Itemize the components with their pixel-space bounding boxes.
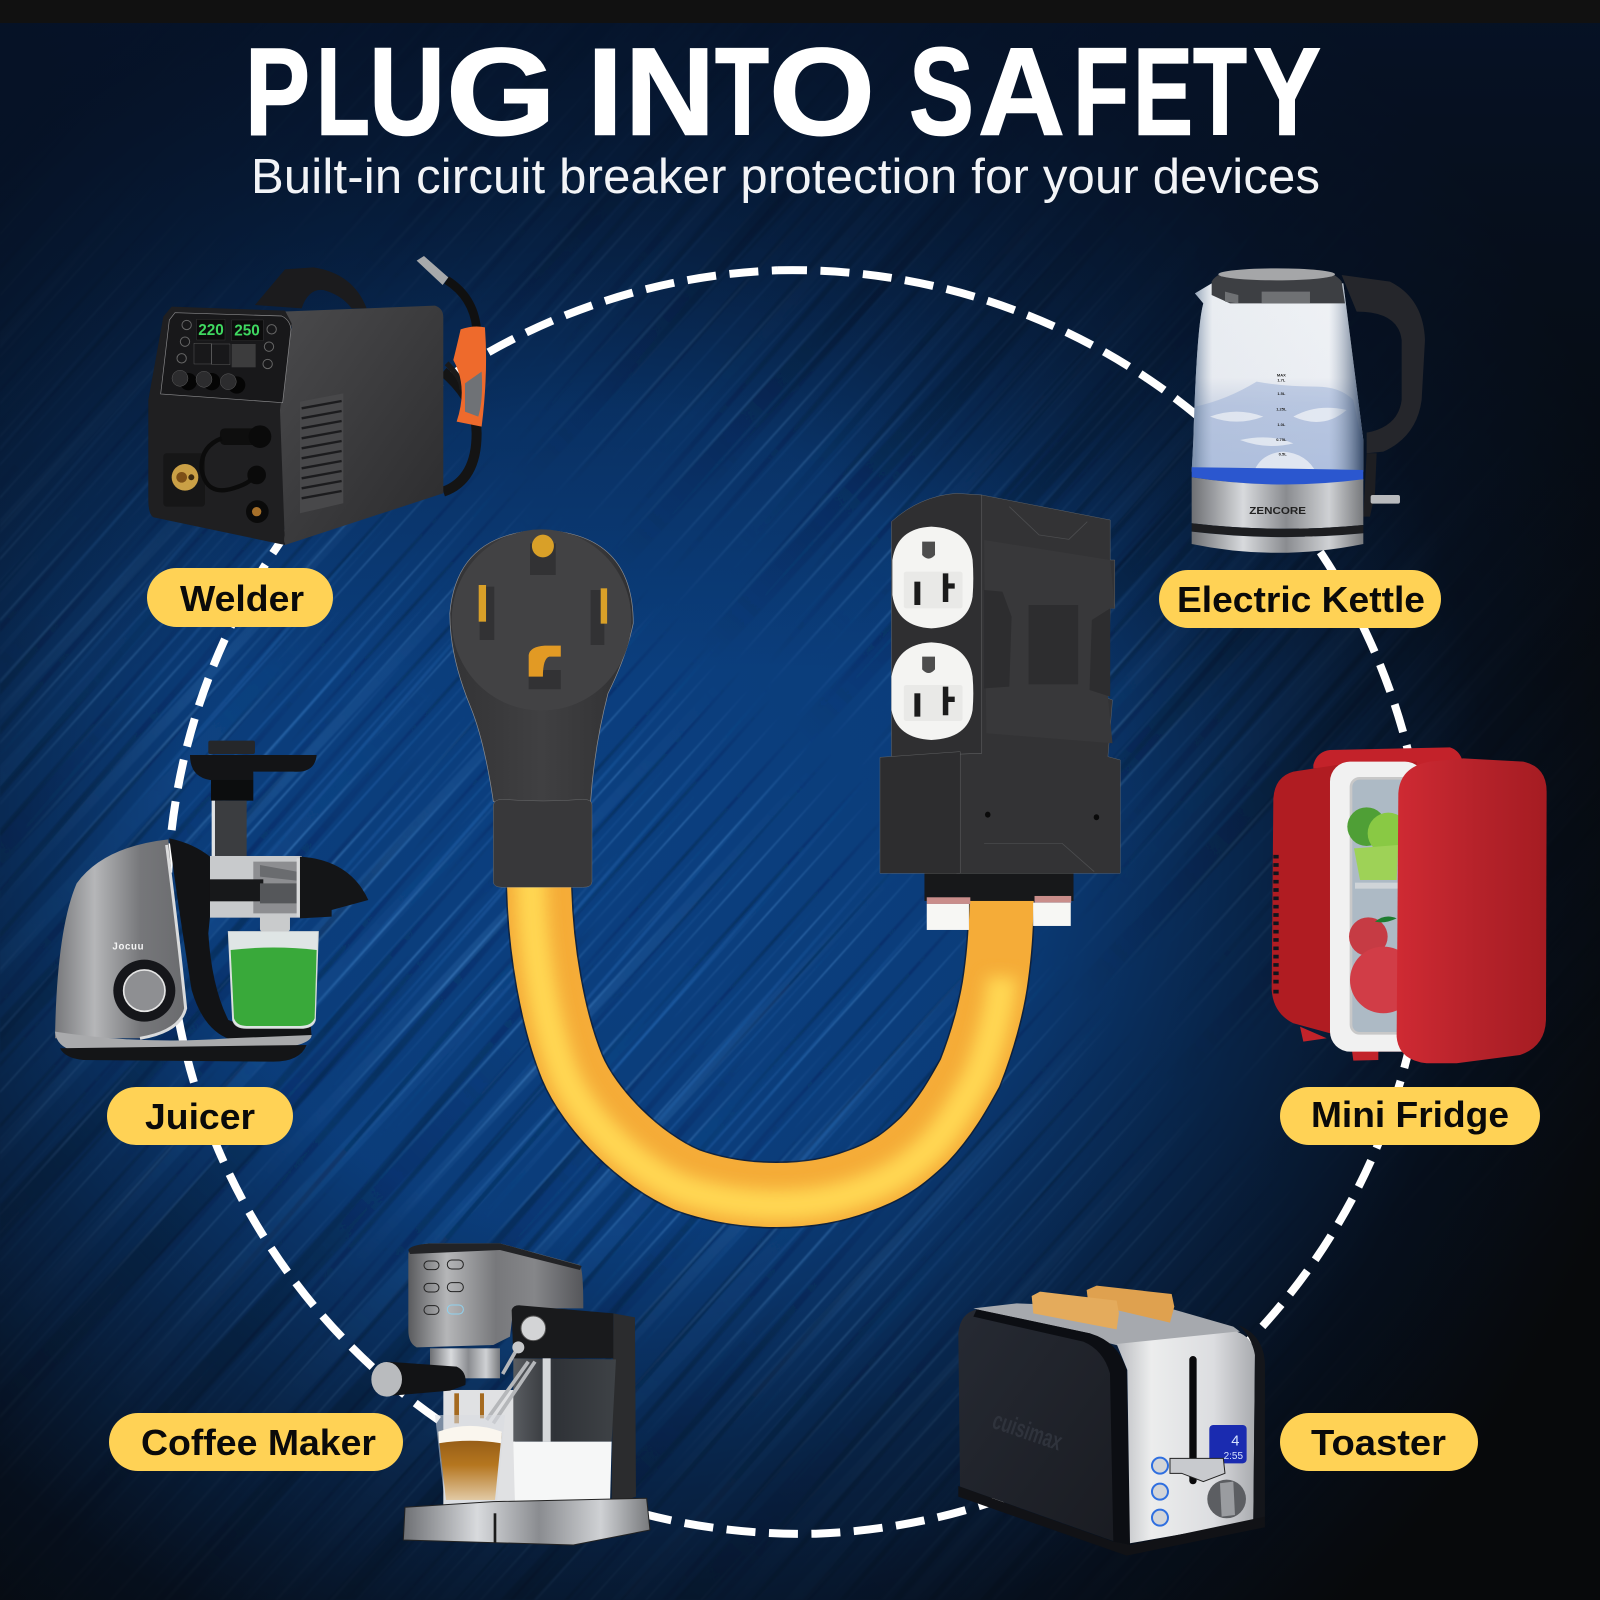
title: T	[1193, 24, 1247, 162]
LCD display: 4	[1231, 1434, 1239, 1450]
title: U	[369, 24, 445, 162]
label: Coffee Maker	[109, 1413, 403, 1471]
label: Juicer: Juicer	[145, 1096, 255, 1137]
gold connector	[163, 453, 205, 507]
torch grip	[453, 327, 486, 427]
label: Mini Fridge	[1280, 1087, 1540, 1145]
portafilter	[371, 1362, 466, 1397]
scale markings	[1276, 372, 1287, 457]
device: welder	[148, 256, 486, 545]
displays: 250	[234, 323, 260, 340]
glass	[1192, 283, 1363, 472]
chrome auger	[208, 856, 302, 918]
device: toaster	[958, 1286, 1265, 1556]
control section	[512, 1305, 613, 1358]
milk	[513, 1442, 612, 1508]
label: Welder: Welder	[180, 578, 304, 619]
buttons	[1152, 1458, 1168, 1526]
front of housing	[891, 493, 982, 757]
steel base	[1192, 477, 1363, 529]
label: Welder	[147, 568, 333, 627]
title: S	[909, 24, 974, 162]
vents	[300, 393, 343, 513]
steam wand	[487, 1347, 535, 1423]
control panel	[161, 313, 291, 403]
displays	[194, 319, 263, 367]
side panel	[278, 306, 443, 545]
base	[958, 1486, 1265, 1556]
label: Electric Kettle	[1159, 570, 1441, 628]
scale markings: 1.7L	[1277, 378, 1286, 383]
handle	[255, 267, 367, 308]
kettle handle	[1342, 275, 1425, 453]
body	[1272, 762, 1417, 1052]
lid	[1212, 269, 1345, 303]
title: O	[769, 24, 875, 162]
title: T	[715, 24, 769, 162]
strain relief	[493, 799, 592, 887]
glass of coffee	[435, 1415, 505, 1505]
breaker terminals	[924, 872, 1074, 930]
title: F	[1073, 24, 1129, 162]
feed tower	[190, 741, 317, 866]
scale markings: 1.25L	[1276, 407, 1287, 412]
outlet 2	[891, 642, 973, 740]
scale markings: 1.0L	[1277, 422, 1286, 427]
title: P	[245, 24, 310, 162]
bread slices	[1032, 1286, 1174, 1329]
dial	[1207, 1480, 1246, 1518]
black neck	[169, 838, 312, 1039]
gold prongs	[479, 535, 607, 677]
scale markings: 1.5L	[1277, 391, 1286, 396]
adapter: outlet box	[880, 493, 1120, 930]
label: Coffee Maker: Coffee Maker	[141, 1422, 376, 1463]
label: Toaster: Toaster	[1311, 1422, 1446, 1463]
switch tab	[1371, 495, 1400, 504]
boiling water	[1195, 382, 1362, 470]
embossed brand: cuisimax	[989, 1407, 1066, 1456]
top lid	[1313, 747, 1462, 768]
plug head	[450, 530, 633, 802]
scale markings: MAX	[1277, 372, 1286, 377]
brand: Jocuu	[112, 942, 144, 953]
label: Juicer	[107, 1087, 293, 1145]
knobs	[172, 370, 245, 394]
title: A	[978, 24, 1065, 162]
right side of housing	[957, 495, 1120, 873]
scale markings: 0.75L	[1276, 437, 1287, 442]
brew group	[430, 1348, 500, 1378]
apples	[1349, 916, 1417, 1013]
door	[1397, 758, 1547, 1063]
lever slot	[1189, 1356, 1197, 1484]
coffee streams	[454, 1393, 459, 1423]
displays: 220	[198, 322, 224, 339]
base	[55, 1032, 312, 1051]
title: Y	[1253, 24, 1321, 162]
black side	[958, 1309, 1129, 1547]
right edge	[1238, 1325, 1265, 1522]
drip tray	[403, 1498, 650, 1545]
title: G	[446, 24, 556, 162]
dashed circle connecting devices	[168, 270, 1426, 1534]
feet	[1300, 1027, 1378, 1061]
head buttons	[424, 1260, 463, 1314]
lever	[1170, 1458, 1225, 1482]
top plate	[973, 1303, 1240, 1346]
LCD display: 2:55	[1224, 1451, 1243, 1462]
outlet 1	[892, 527, 973, 628]
juice cup	[228, 915, 318, 1028]
label: Electric Kettle: Electric Kettle	[1177, 579, 1425, 620]
title: E	[1133, 24, 1193, 162]
blue base light	[1192, 467, 1363, 485]
vents	[1273, 857, 1279, 992]
adapter: plug	[450, 529, 633, 887]
steel front	[1117, 1332, 1255, 1543]
welding torch cable	[443, 372, 477, 492]
subtitle: Built-in circuit breaker protection for your devices	[251, 150, 1320, 204]
label: Toaster	[1280, 1413, 1478, 1471]
panel buttons	[177, 320, 276, 369]
device: juicer	[55, 741, 368, 1062]
jumper cable and sockets	[202, 425, 271, 523]
title: L	[316, 24, 370, 162]
device: coffee maker	[371, 1243, 650, 1545]
juice outlet cone	[300, 857, 368, 918]
limes	[1347, 807, 1409, 880]
scale markings: 0.5L	[1279, 452, 1287, 457]
title: N	[625, 24, 715, 162]
body	[55, 839, 187, 1038]
machine head	[408, 1243, 583, 1347]
speed dial	[113, 960, 175, 1022]
white liner	[1330, 762, 1425, 1052]
front face	[148, 307, 292, 545]
adapter: yellow cord	[530, 860, 1002, 1205]
device: electric kettle	[1192, 268, 1425, 553]
device: mini fridge	[1272, 747, 1547, 1063]
backsplash	[443, 1390, 515, 1507]
title: I	[587, 24, 623, 162]
brand: ZENCORE	[1249, 506, 1306, 517]
right column	[612, 1313, 636, 1505]
water tank	[513, 1358, 616, 1442]
label: Mini Fridge: Mini Fridge	[1311, 1094, 1509, 1135]
LCD display	[1209, 1425, 1247, 1463]
